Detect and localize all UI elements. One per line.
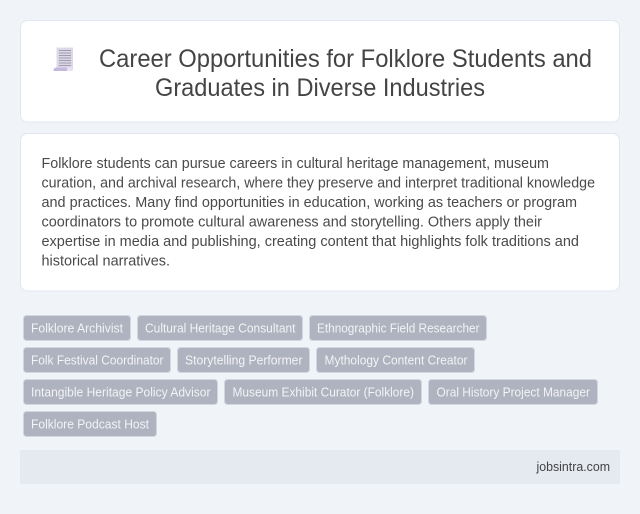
heading: Graduates in Diverse Industries bbox=[155, 74, 485, 102]
text block: description: expertise in media and publishing, creating content that highlights folk traditions and bbox=[42, 233, 579, 250]
footer source text: jobsintra.com bbox=[536, 459, 610, 474]
tag: Storytelling Performer: Storytelling Performer bbox=[185, 352, 303, 368]
tag: Museum Exhibit Curator (Folklore) bbox=[224, 380, 422, 404]
tag list bbox=[24, 316, 598, 436]
text block: description bbox=[42, 155, 595, 270]
tag: Intangible Heritage Policy Advisor: Intangible Heritage Policy Advisor bbox=[31, 384, 211, 400]
tag: Museum Exhibit Curator (Folklore): Museum Exhibit Curator (Folklore) bbox=[232, 384, 414, 400]
tag: Intangible Heritage Policy Advisor bbox=[24, 380, 218, 404]
tag: Mythology Content Creator: Mythology Content Creator bbox=[324, 352, 468, 368]
tag: Ethnographic Field Researcher: Ethnographic Field Researcher bbox=[317, 320, 480, 336]
text block: description: historical narratives. bbox=[42, 252, 170, 270]
tag: Folk Festival Coordinator: Folk Festival Coordinator bbox=[31, 352, 164, 368]
text block: description: Folklore students can pursue careers in cultural heritage management, museum bbox=[42, 155, 549, 172]
text block: description: coordinators to promote cultural awareness and storytelling. Others apply their bbox=[42, 214, 542, 230]
heading bbox=[99, 45, 592, 102]
tag: Folk Festival Coordinator bbox=[24, 348, 170, 372]
tag: Folklore Podcast Host bbox=[24, 412, 156, 436]
tag: Folklore Podcast Host: Folklore Podcast Host bbox=[31, 416, 149, 432]
tag: Cultural Heritage Consultant bbox=[138, 316, 302, 340]
tag: Folklore Archivist bbox=[24, 316, 130, 340]
tag: Oral History Project Manager bbox=[428, 380, 598, 404]
footer bar bbox=[20, 450, 620, 484]
panel: description card bbox=[20, 134, 620, 291]
tag: Ethnographic Field Researcher bbox=[310, 316, 486, 340]
panel: header card bbox=[20, 20, 620, 122]
tag: Mythology Content Creator bbox=[316, 348, 474, 372]
tag: Storytelling Performer bbox=[178, 348, 310, 372]
tag: Cultural Heritage Consultant: Cultural Heritage Consultant bbox=[145, 320, 296, 336]
heading: Career Opportunities for Folklore Students and bbox=[99, 45, 592, 73]
text block: description: and practices. Many find opportunities in education, working as teachers or program bbox=[42, 194, 577, 211]
icon: paper scroll bbox=[54, 48, 73, 71]
tag: Folklore Archivist: Folklore Archivist bbox=[31, 320, 123, 336]
text block: description: curation, and archival research, where they preserve and interpret traditional knowledge bbox=[42, 174, 595, 192]
tag: Oral History Project Manager: Oral History Project Manager bbox=[436, 384, 591, 400]
